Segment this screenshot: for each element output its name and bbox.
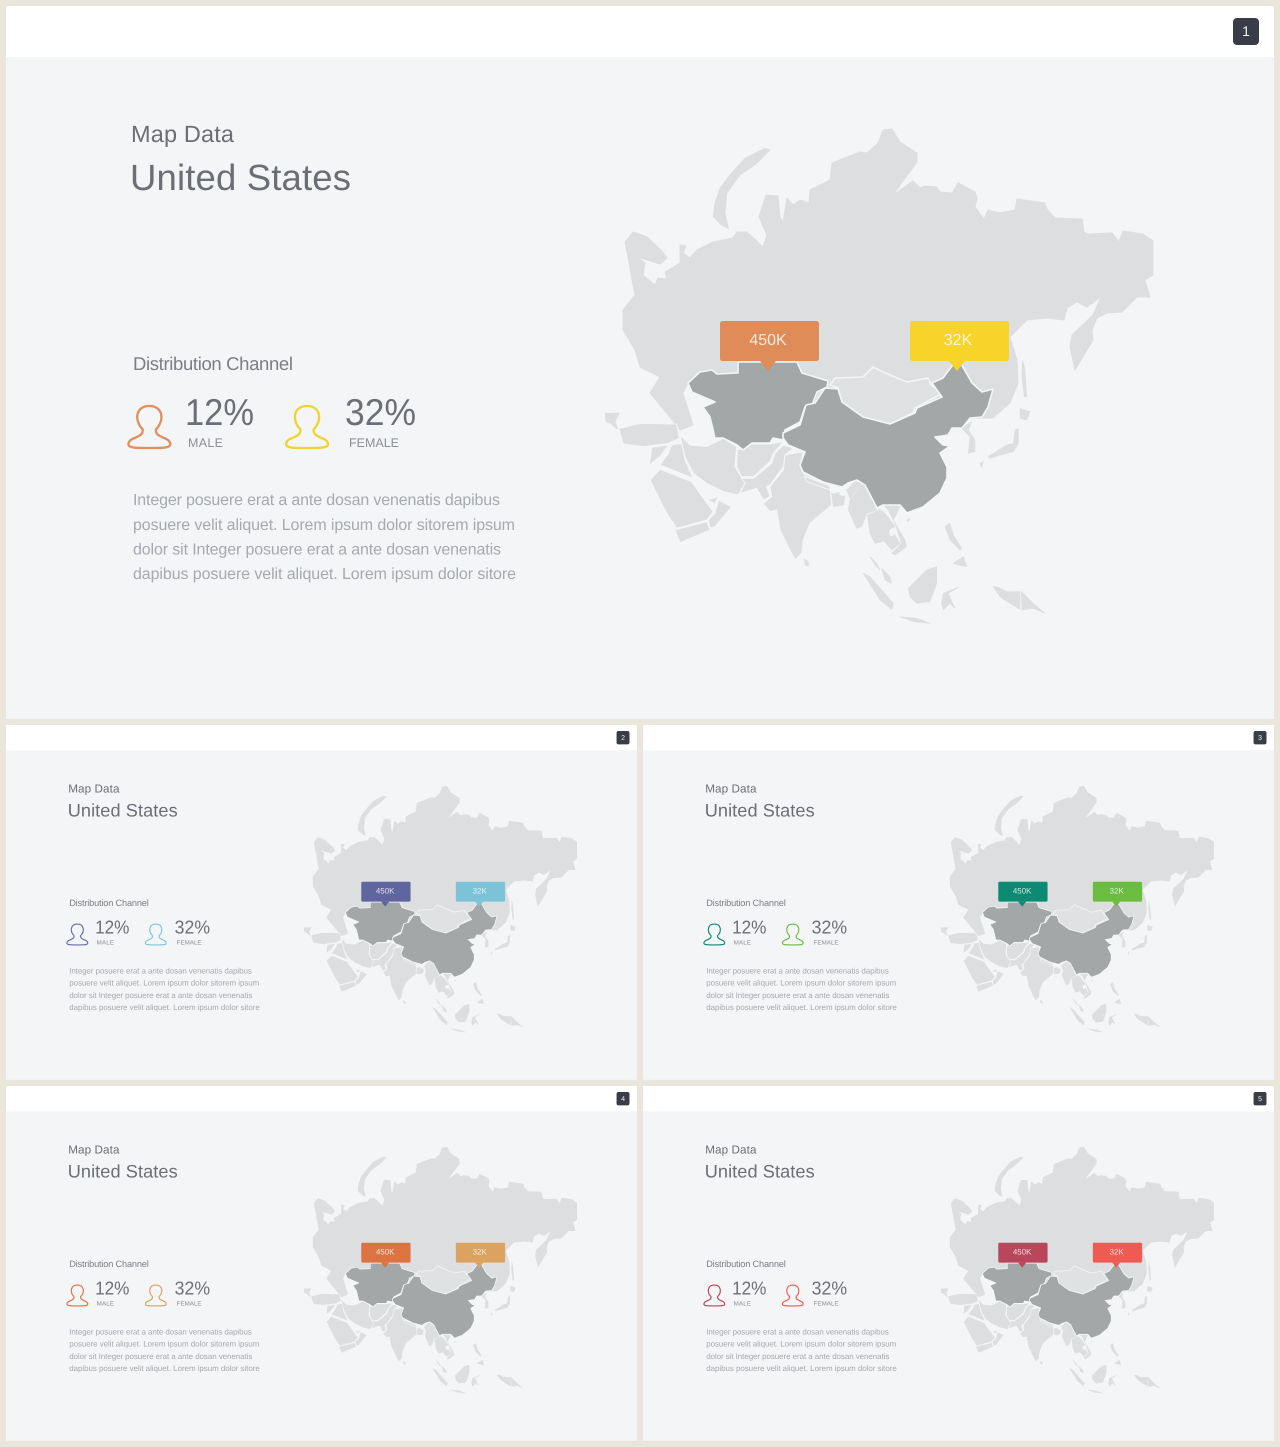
- icon: female: [145, 1285, 166, 1306]
- small heading: Map Data: [131, 121, 235, 147]
- body text: posuere velit aliquet. Lorem ipsum dolor sitorem ipsum: [706, 979, 896, 988]
- stat: female: 32%: [345, 391, 416, 433]
- title: United States: [68, 1161, 178, 1182]
- stat: male: 12%: [732, 1278, 766, 1298]
- page badge 5: [1254, 1092, 1266, 1105]
- page badge 3: 3: [1258, 733, 1262, 741]
- callout: 450K: 450K: [1013, 1248, 1032, 1257]
- body text: posuere velit aliquet. Lorem ipsum dolor sitorem ipsum: [133, 517, 515, 534]
- body text: dolor sit Integer posuere erat a ante dosan venenatis: [706, 991, 889, 1000]
- icon: female: [286, 406, 328, 448]
- icon: female: [145, 924, 166, 945]
- map of Asia: [304, 786, 577, 1032]
- stat: male: 12%: [95, 1278, 129, 1298]
- subheading: Distribution Channel: [706, 898, 786, 908]
- page badge 3: [1254, 731, 1266, 744]
- stat: female: [812, 917, 847, 946]
- callout: 32K: [1093, 882, 1142, 907]
- small heading: Map Data: [68, 1143, 120, 1156]
- callout: 32K: [910, 321, 1009, 371]
- icon: female: [782, 1285, 803, 1306]
- callout: 450K: 450K: [376, 1248, 395, 1257]
- panel: slide 1: [6, 6, 1274, 719]
- body text: Integer posuere erat a ante dosan venenatis dapibus: [133, 492, 500, 509]
- callout: 32K: 32K: [1110, 1248, 1124, 1257]
- callout: 32K: 32K: [473, 1248, 487, 1257]
- stat: female: 32%: [812, 917, 847, 937]
- stat: male: [95, 917, 129, 946]
- callout: 32K: [1093, 1243, 1142, 1268]
- small heading: Map Data: [705, 1143, 757, 1156]
- map of Asia: [304, 1147, 577, 1393]
- callout: 32K: 32K: [473, 887, 487, 896]
- stat: female: [175, 917, 210, 946]
- callout: 450K: [361, 882, 411, 907]
- map of Asia: [604, 129, 1153, 623]
- page badge 4: 4: [621, 1094, 625, 1102]
- stat: male: 12%: [95, 917, 129, 937]
- stat: female: FEMALE: [814, 1300, 839, 1307]
- callout: 450K: 450K: [376, 887, 395, 896]
- stat: female: FEMALE: [814, 939, 839, 946]
- stat: female: 32%: [175, 917, 210, 937]
- map of Asia: [941, 786, 1214, 1032]
- stat: male: MALE: [97, 1300, 114, 1307]
- callout: 450K: 450K: [749, 332, 787, 349]
- page badge 2: 2: [621, 733, 625, 741]
- stat: male: [732, 917, 766, 946]
- title: United States: [68, 800, 178, 821]
- stat: male: MALE: [97, 939, 114, 946]
- callout: 450K: [361, 1243, 411, 1268]
- body text: posuere velit aliquet. Lorem ipsum dolor sitorem ipsum: [69, 1340, 259, 1349]
- stat: male: MALE: [734, 939, 751, 946]
- stat: male: MALE: [734, 1300, 751, 1307]
- page badge 2: [617, 731, 629, 744]
- body text: [706, 967, 897, 1012]
- body text: dolor sit Integer posuere erat a ante dosan venenatis: [69, 991, 252, 1000]
- icon: male: [67, 924, 88, 945]
- stat: male: [185, 391, 254, 450]
- panel: slide 5: [643, 1086, 1274, 1441]
- body text: Integer posuere erat a ante dosan venenatis dapibus: [69, 967, 252, 975]
- body text: Integer posuere erat a ante dosan venenatis dapibus: [69, 1328, 252, 1336]
- body text: dapibus posuere velit aliquet. Lorem ipsum dolor sitore: [133, 566, 516, 583]
- callout: 32K: 32K: [944, 332, 973, 349]
- body text: [69, 967, 260, 1012]
- icon: male: [128, 406, 170, 448]
- stat: male: 12%: [732, 917, 766, 937]
- stat: female: 32%: [175, 1278, 210, 1298]
- body text: posuere velit aliquet. Lorem ipsum dolor sitorem ipsum: [706, 1340, 896, 1349]
- body text: dolor sit Integer posuere erat a ante dosan venenatis: [69, 1352, 252, 1361]
- subheading: Distribution Channel: [69, 1259, 149, 1269]
- stat: female: FEMALE: [177, 1300, 202, 1307]
- stat: female: FEMALE: [349, 436, 399, 450]
- callout: 450K: 450K: [1013, 887, 1032, 896]
- body text: [706, 1328, 897, 1373]
- body text: posuere velit aliquet. Lorem ipsum dolor sitorem ipsum: [69, 979, 259, 988]
- callout: 450K: [998, 1243, 1048, 1268]
- body text: dapibus posuere velit aliquet. Lorem ipsum dolor sitore: [69, 1365, 260, 1373]
- stat: female: [175, 1278, 210, 1307]
- stat: female: [812, 1278, 847, 1307]
- body text: Integer posuere erat a ante dosan venenatis dapibus: [706, 967, 889, 975]
- icon: female: [782, 924, 803, 945]
- body text: dolor sit Integer posuere erat a ante dosan venenatis: [706, 1352, 889, 1361]
- body text: Integer posuere erat a ante dosan venenatis dapibus: [706, 1328, 889, 1336]
- panel: slide 2: [6, 725, 637, 1080]
- stat: male: MALE: [188, 436, 223, 450]
- icon: male: [704, 924, 725, 945]
- page badge 5: 5: [1258, 1094, 1262, 1102]
- page badge 1: [1233, 18, 1259, 45]
- callout: 450K: [720, 321, 819, 371]
- body text: dolor sit Integer posuere erat a ante dosan venenatis: [133, 542, 501, 558]
- small heading: Map Data: [705, 782, 757, 795]
- subheading: Distribution Channel: [133, 353, 293, 374]
- body text: dapibus posuere velit aliquet. Lorem ipsum dolor sitore: [706, 1004, 897, 1012]
- panel: slide 4: [6, 1086, 637, 1441]
- stat: male: [95, 1278, 129, 1307]
- stat: female: 32%: [812, 1278, 847, 1298]
- callout: 32K: 32K: [1110, 887, 1124, 896]
- subheading: Distribution Channel: [69, 898, 149, 908]
- subheading: Distribution Channel: [706, 1259, 786, 1269]
- icon: male: [704, 1285, 725, 1306]
- icon: male: [67, 1285, 88, 1306]
- title: United States: [705, 1161, 815, 1182]
- map of Asia: [941, 1147, 1214, 1393]
- title: United States: [130, 157, 351, 198]
- stat: female: [345, 391, 416, 450]
- callout: 450K: [998, 882, 1048, 907]
- body text: [133, 492, 516, 583]
- stat: male: [732, 1278, 766, 1307]
- stat: female: FEMALE: [177, 939, 202, 946]
- title: United States: [705, 800, 815, 821]
- stat: male: 12%: [185, 391, 254, 433]
- page badge 4: [617, 1092, 629, 1105]
- page badge 1: 1: [1242, 23, 1250, 39]
- panel: slide 3: [643, 725, 1274, 1080]
- small heading: Map Data: [68, 782, 120, 795]
- body text: dapibus posuere velit aliquet. Lorem ipsum dolor sitore: [706, 1365, 897, 1373]
- body text: [69, 1328, 260, 1373]
- callout: 32K: [456, 882, 505, 907]
- body text: dapibus posuere velit aliquet. Lorem ipsum dolor sitore: [69, 1004, 260, 1012]
- callout: 32K: [456, 1243, 505, 1268]
